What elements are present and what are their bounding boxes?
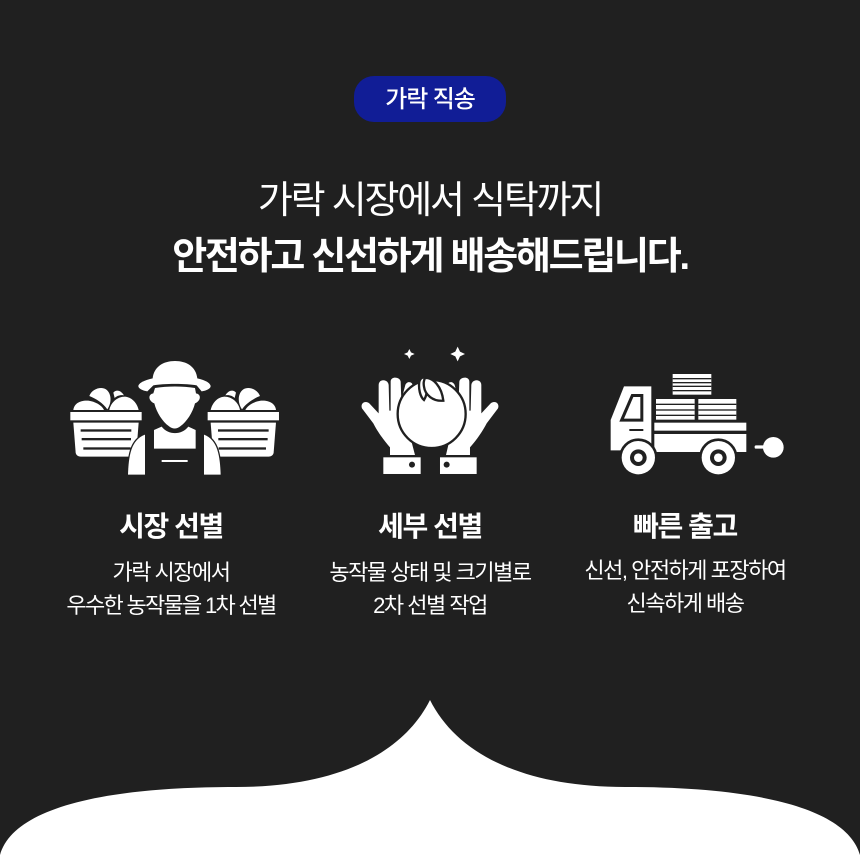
heading: 시장 선별: [119, 511, 223, 542]
badge: 가락 직송: [354, 76, 506, 122]
description: [66, 560, 276, 618]
column 1: market selection: [66, 511, 276, 618]
description: 우수한 농작물을 1차 선별: [66, 593, 276, 618]
title: 안전하고 신선하게 배송해드립니다.: [172, 236, 688, 278]
description: [329, 560, 532, 618]
column 3: fast shipping: [584, 511, 786, 616]
title: 가락 시장에서 식탁까지: [258, 180, 602, 222]
description: [584, 558, 786, 616]
column 2: detailed selection: [329, 511, 532, 618]
description: 신속하게 배송: [626, 591, 744, 616]
description: 2차 선별 작업: [373, 593, 487, 618]
description: 신선, 안전하게 포장하여: [584, 558, 786, 583]
badge: 가락 직송: 가락 직송: [385, 86, 475, 113]
description: 가락 시장에서: [112, 560, 230, 585]
heading: 빠른 출고: [633, 511, 737, 542]
heading: 세부 선별: [378, 511, 482, 542]
title: [172, 180, 688, 278]
description: 농작물 상태 및 크기별로: [329, 560, 531, 585]
